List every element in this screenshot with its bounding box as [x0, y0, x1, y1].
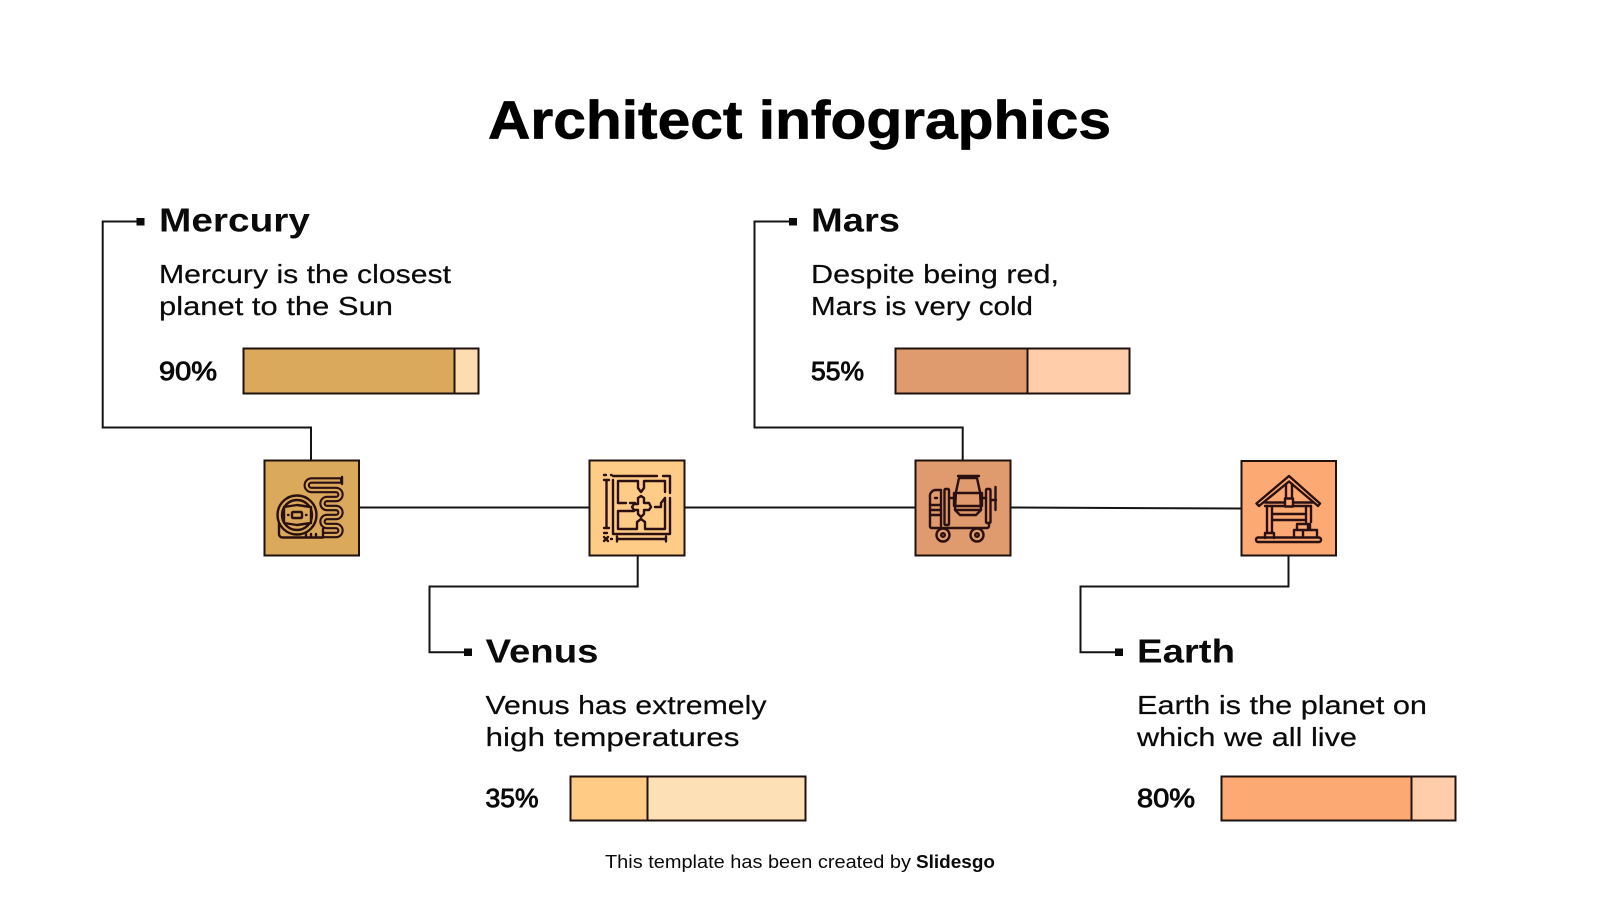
connector: Mars: [754, 218, 963, 460]
progress bar: 35%: [570, 776, 806, 820]
text: Mercury description: planet to the Sun: [159, 291, 393, 321]
connector: Venus: [430, 556, 638, 656]
icon: timber house frame: [1242, 461, 1336, 556]
panel: Mars: [754, 202, 1130, 460]
connector: Earth: [1080, 556, 1288, 656]
text: Earth description: Earth is the planet on: [1137, 690, 1427, 720]
progress bar: 55%: [896, 348, 1130, 394]
heading: Earth: Earth: [1137, 632, 1235, 670]
panel: Venus: [430, 556, 806, 820]
heading: Venus: Venus: [486, 632, 598, 670]
text: Mars description: Despite being red,: [811, 259, 1059, 289]
text: Mercury description: Mercury is the closest: [159, 259, 452, 289]
icon: cement mixer: [916, 460, 1010, 556]
heading: Mercury: Mercury: [159, 202, 311, 238]
text: Venus description: Venus has extremely: [486, 690, 766, 720]
footer credit: This template has been created by: [605, 852, 911, 872]
heading: Mars: Mars: [811, 202, 900, 238]
value: 55%: 55%: [811, 356, 864, 386]
progress bar: 80%: [1222, 776, 1456, 820]
text: Earth description: which we all live: [1136, 722, 1357, 752]
text: Mars description: Mars is very cold: [811, 291, 1033, 321]
footer credit: Slidesgo: [916, 852, 995, 872]
icon: floor plan: [590, 460, 684, 556]
progress bar: 90%: [244, 348, 478, 394]
text: Venus description: high temperatures: [486, 722, 740, 752]
value: 80%: 80%: [1137, 783, 1195, 813]
panel: Earth: [1080, 556, 1456, 820]
icon: tape measure: [264, 460, 359, 556]
connector: Mercury: [103, 218, 311, 460]
timeline connector: [359, 508, 1241, 509]
value: 90%: 90%: [159, 356, 217, 386]
panel: Mercury: [103, 202, 478, 460]
value: 35%: 35%: [486, 783, 538, 813]
title: Architect infographics: [488, 90, 1111, 150]
